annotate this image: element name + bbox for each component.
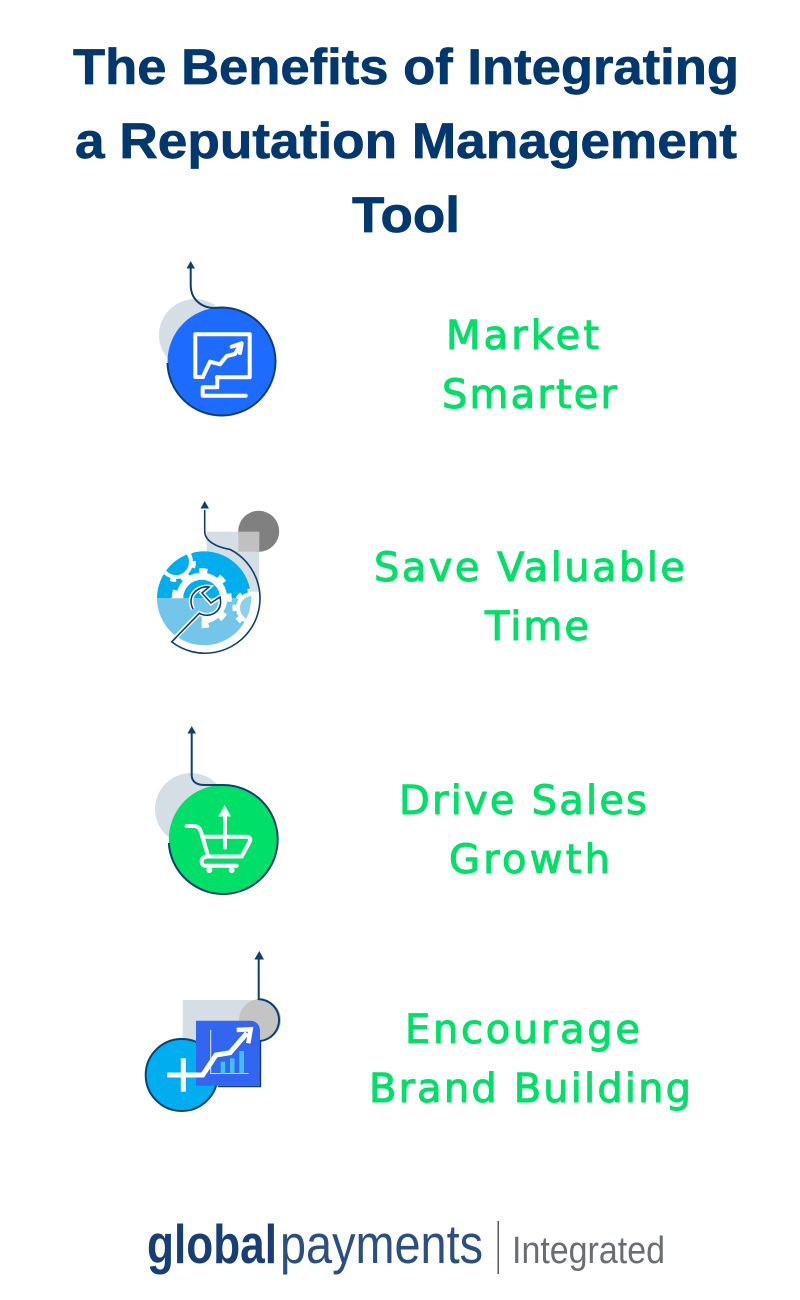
- label: market smarter: [442, 313, 618, 418]
- label: encourage brand building: Brand Building: [369, 1066, 691, 1112]
- label: save valuable time: Save Valuable: [374, 545, 685, 591]
- icon: save time gears and wrench: [157, 501, 279, 653]
- label: encourage brand building: [369, 1007, 691, 1112]
- label: market smarter: Market: [446, 313, 599, 359]
- label: drive sales growth: Growth: [449, 837, 610, 883]
- logo: global payments integrated: [147, 1213, 665, 1275]
- icon: sales growth shopping cart: [155, 726, 278, 894]
- icon: brand building chart and plus: [146, 951, 281, 1111]
- label: drive sales growth: Drive Sales: [399, 778, 647, 824]
- label: drive sales growth: [399, 778, 647, 883]
- label: market smarter: Smarter: [442, 372, 618, 418]
- title: [73, 39, 739, 243]
- label: save valuable time: Time: [484, 604, 589, 650]
- icon: market smarter monitor chart: [159, 261, 276, 416]
- label: encourage brand building: Encourage: [405, 1007, 640, 1053]
- title: a Reputation Management: [75, 113, 737, 169]
- logo: global payments integrated: payments: [280, 1213, 483, 1275]
- logo: global payments integrated: global: [147, 1213, 277, 1275]
- label: save valuable time: [374, 545, 685, 650]
- infographic canvas: [73, 47, 737, 1274]
- logo: global payments integrated: Integrated: [512, 1230, 665, 1272]
- title: The Benefits of Integrating: [73, 39, 739, 95]
- title: Tool: [352, 187, 460, 243]
